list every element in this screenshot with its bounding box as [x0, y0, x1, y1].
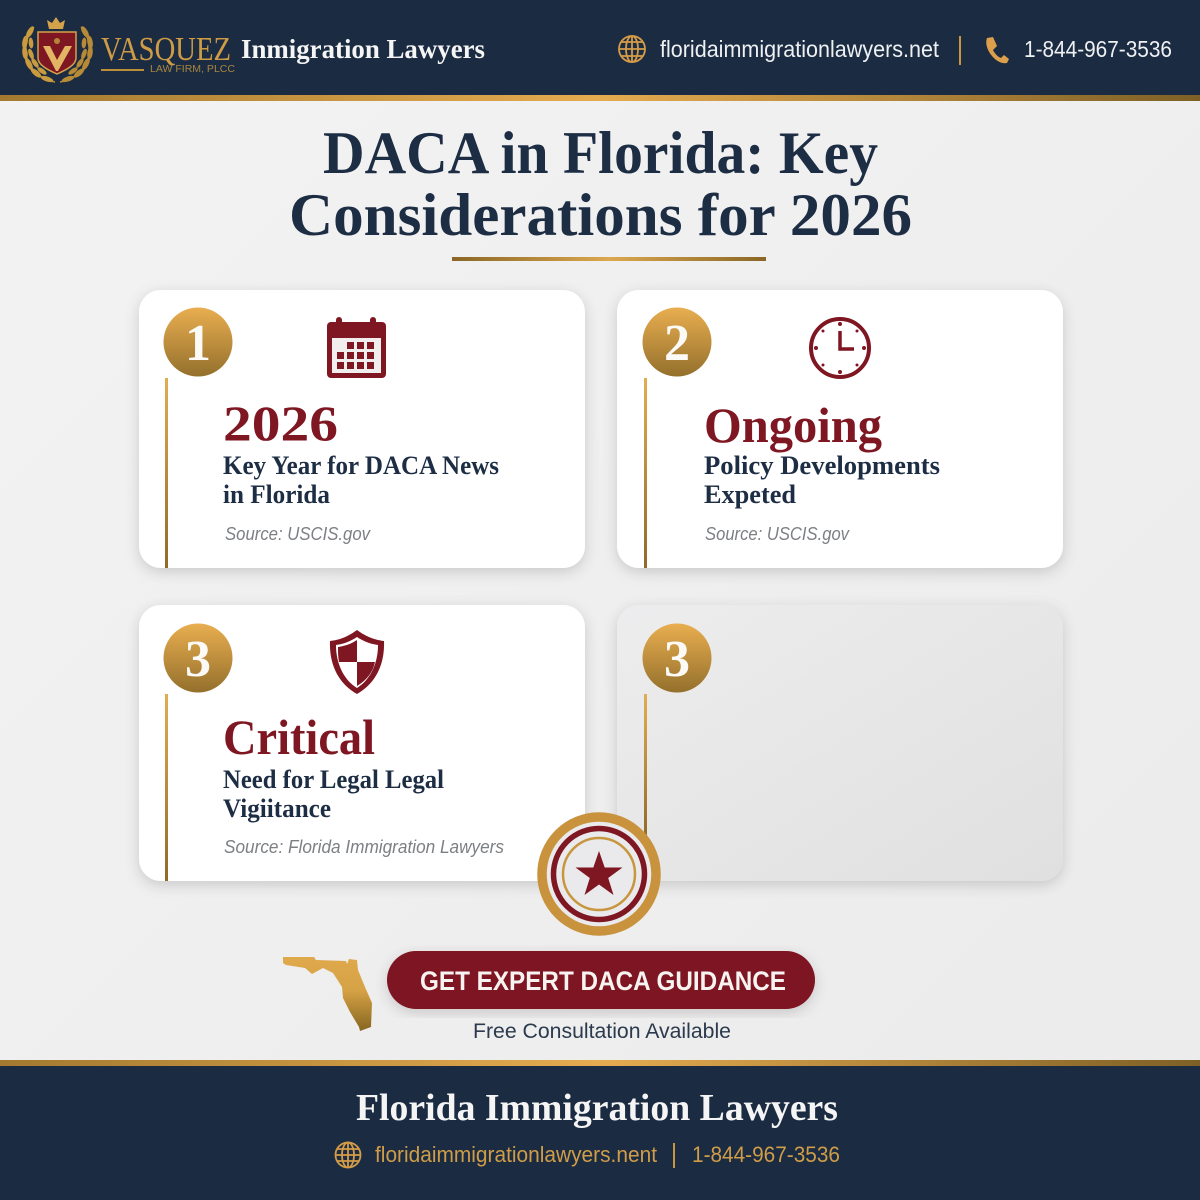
card 1 text: in Florida: [223, 480, 330, 509]
header band: [0, 0, 1200, 101]
panel: card 2: [617, 290, 1063, 568]
card 2 text: Ongoing: [704, 397, 882, 453]
footer phone: 1-844-967-3536: [692, 1142, 840, 1167]
card 1 text: Source: USCIS.gov: [225, 524, 371, 544]
card 2 text: Expeted: [704, 480, 797, 509]
title: [289, 120, 912, 248]
card 3 text: [223, 709, 504, 857]
footer website: floridaimmigrationlawyers.nent: [375, 1142, 657, 1167]
icon: globe: [619, 36, 645, 62]
badge 1: 1: [185, 315, 211, 372]
badge 3: 3: [185, 631, 211, 688]
card 3 text: Source: Florida Immigration Lawyers: [224, 837, 504, 857]
card 3 text: Vigiitance: [223, 794, 331, 823]
icon: star seal: [542, 817, 656, 931]
footer title: Florida Immigration Lawyers: [356, 1087, 838, 1129]
logo emblem: [21, 17, 94, 83]
call to action button: [387, 951, 815, 1009]
card 2 text: [704, 397, 940, 544]
icon: footer globe: [336, 1142, 360, 1168]
card 1 text: [223, 395, 499, 544]
icon: shield: [330, 630, 384, 694]
consultation note: Free Consultation Available: [473, 1020, 731, 1043]
icon: calendar: [327, 317, 386, 378]
panel: card 1: [139, 290, 585, 568]
card 1 text: 2026: [223, 395, 338, 451]
icon: phone: [986, 37, 1009, 63]
badge 1: [164, 308, 232, 376]
card 3 text: Critical: [223, 709, 375, 765]
panel: empty card 4: [617, 605, 1063, 881]
call to action button: GET EXPERT DACA GUIDANCE: [420, 966, 786, 996]
header title: Inmigration Lawyers: [241, 34, 485, 64]
badge 2: [642, 308, 712, 376]
panel: card 3: [139, 605, 585, 881]
title: DACA in Florida: Key: [323, 120, 878, 186]
card 1 text: Key Year for DACA News: [223, 451, 499, 480]
footer band: [0, 1060, 1200, 1200]
header phone: 1-844-967-3536: [1024, 36, 1172, 62]
card 2 text: Policy Developments: [704, 451, 940, 480]
logo wordmark: VASQUEZ: [101, 31, 231, 68]
card 3 text: Need for Legal Legal: [223, 765, 444, 794]
badge 3 repeat: 3: [664, 631, 690, 688]
logo wordmark: LAW FIRM, PLCC: [150, 64, 235, 75]
icon: clock: [811, 319, 869, 377]
badge 3 repeat: [642, 624, 712, 692]
card 2 text: Source: USCIS.gov: [705, 524, 850, 544]
title: Considerations for 2026: [289, 182, 912, 248]
badge 3: [164, 624, 232, 692]
icon: Florida map: [283, 957, 372, 1031]
header website: floridaimmigrationlawyers.net: [660, 36, 940, 62]
badge 2: 2: [664, 315, 690, 372]
